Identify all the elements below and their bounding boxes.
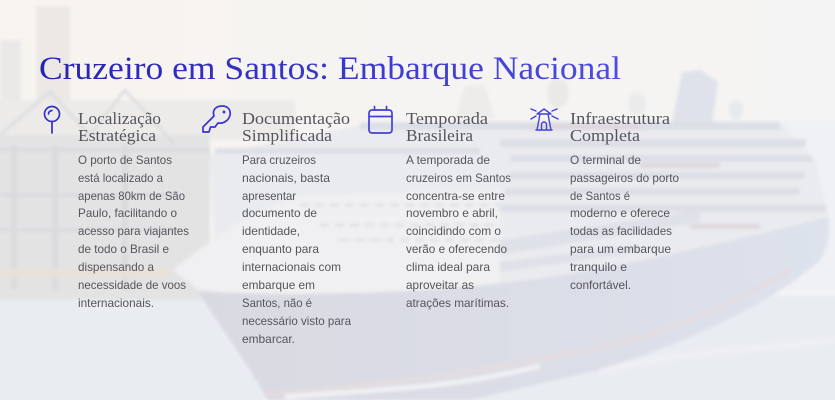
heading: localização estratégica (78, 109, 161, 145)
text block: temporada: aproveitar as (406, 278, 474, 292)
text block: infraestrutura: para um embarque (570, 242, 671, 256)
white bow (173, 190, 500, 293)
funnel and masts (672, 70, 718, 125)
text block: infraestrutura (570, 153, 679, 292)
text block: temporada: coincidindo com o (406, 224, 501, 238)
text block: localização: está localizado a (78, 171, 163, 185)
icon: lighthouse (531, 109, 558, 130)
text block: documentação: apresentar (242, 189, 296, 203)
heading: infraestrutura completa: Infraestrutura (570, 109, 670, 128)
text block: documentação: internacionais com (242, 260, 341, 274)
text block: temporada: concentra-se entre (406, 189, 505, 203)
text block: temporada (406, 153, 511, 310)
icon: map pin (44, 106, 60, 133)
text block: documentação: embarcar. (242, 332, 295, 346)
heading: temporada brasileira: Temporada (406, 109, 488, 128)
text block: localização: dispensando a (78, 260, 154, 274)
text block: temporada: verão e oferecendo (406, 242, 507, 256)
text block: localização: acesso para viajantes (78, 224, 189, 238)
text block: infraestrutura: moderno e oferece (570, 206, 670, 220)
heading: infraestrutura completa (570, 109, 670, 145)
text block: documentação: enquanto para (242, 242, 319, 256)
text block: documentação: necessário visto para (242, 314, 351, 328)
text block: temporada: A temporada de (406, 153, 490, 167)
superstructure (210, 122, 828, 290)
text block: infraestrutura: todas as facilidades (570, 224, 672, 238)
text block: infraestrutura: confortável. (570, 278, 631, 292)
text block: documentação: Santos, não é (242, 296, 312, 310)
text block: infraestrutura: passageiros do porto (570, 171, 679, 185)
text block: documentação: embarque em (242, 278, 315, 292)
text block: localização (78, 153, 189, 310)
text block: infraestrutura: tranquilo e (570, 260, 627, 274)
text block: documentação: documento de (242, 206, 317, 220)
heading: localização estratégica: Localização (78, 109, 161, 128)
text block: localização: apenas 80km de São (78, 189, 185, 203)
text block: temporada: cruzeiros em Santos (406, 171, 511, 185)
text block: localização: necessidade de voos (78, 278, 186, 292)
text block: temporada: novembro e abril, (406, 206, 498, 220)
heading: localização estratégica: Estratégica (78, 126, 156, 145)
text block: infraestrutura: de Santos é (570, 189, 630, 203)
heading: temporada brasileira (406, 109, 488, 145)
heading: infraestrutura completa: Completa (570, 126, 640, 145)
text block: localização: internacionais. (78, 296, 154, 310)
icon: key (203, 106, 230, 132)
text block: infraestrutura: O terminal de (570, 153, 641, 167)
title: Cruzeiro em Santos: Embarque Nacional (39, 51, 621, 87)
text block: documentação: nacionais, basta (242, 171, 330, 185)
heading: documentação simplificada (242, 109, 350, 145)
text block: documentação: Para cruzeiros (242, 153, 316, 167)
text block: localização: de todo o Brasil e (78, 242, 169, 256)
panel: documentação simplificada (203, 106, 351, 346)
icon: calendar (369, 106, 392, 133)
hull (198, 217, 829, 400)
heading: documentação simplificada: Simplificada (242, 126, 332, 145)
panel: localização estratégica (44, 106, 189, 310)
text block: temporada: atrações marítimas. (406, 296, 509, 310)
panel: infraestrutura completa (531, 109, 679, 292)
text block: localização: Paulo, facilitando o (78, 206, 177, 220)
text block: temporada: clima ideal para (406, 260, 490, 274)
heading: temporada brasileira: Brasileira (406, 126, 473, 145)
text block: documentação (242, 153, 351, 346)
text block: documentação: identidade, (242, 224, 300, 238)
panel: temporada brasileira (369, 106, 511, 310)
text block: localização: O porto de Santos (78, 153, 172, 167)
heading: documentação simplificada: Documentação (242, 109, 350, 128)
